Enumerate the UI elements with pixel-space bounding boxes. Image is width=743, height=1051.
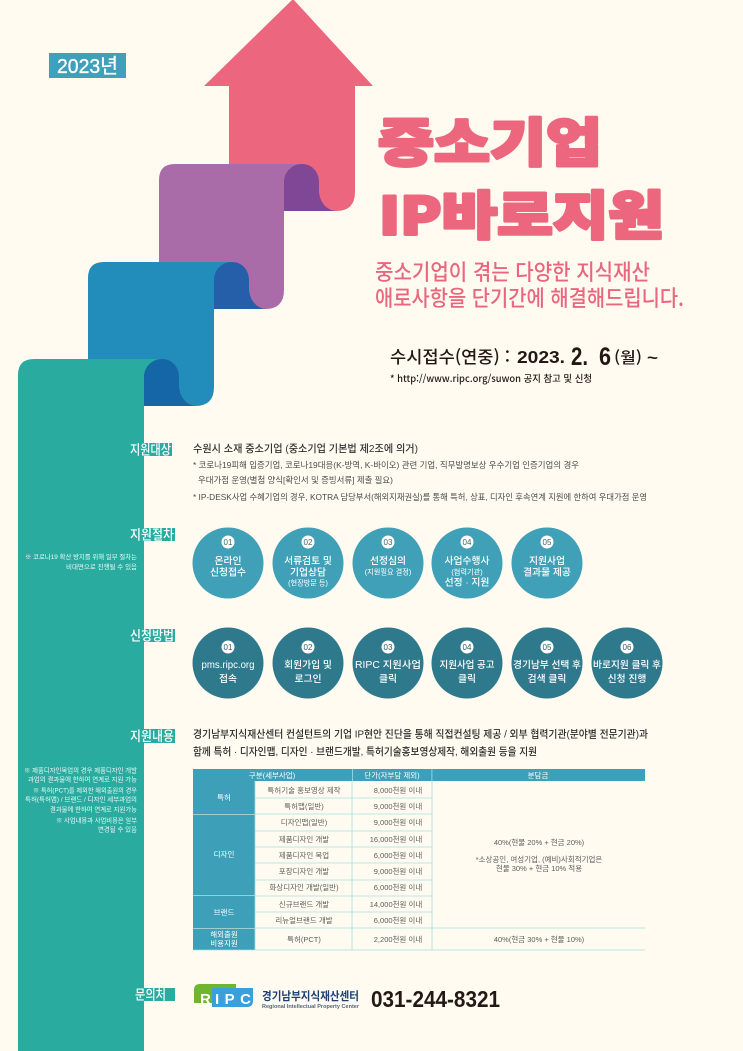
- eligibility text: 수원시 소재 중소기업 (중소기업 기본법 제2조에 의거): [193, 442, 418, 455]
- step 3: (지원필요 결정): [365, 568, 411, 576]
- table category cells: 디자인: [214, 849, 234, 859]
- method 4: 지원사업 공고: [440, 658, 494, 671]
- step 5: 결과물 제공: [523, 566, 571, 578]
- table detail and unit price rows: 포장디자인 개발: [279, 866, 329, 876]
- application date: 6: [599, 343, 611, 371]
- table detail and unit price rows: 특허(PCT): [287, 935, 321, 944]
- main title: [378, 102, 664, 250]
- table grid lines: [193, 781, 645, 950]
- procedure side note: [25, 552, 137, 571]
- method 5: 검색 클릭: [528, 672, 566, 685]
- table detail and unit price rows: 6,000천원 이내: [374, 882, 422, 892]
- step 4: 선정 · 지원: [445, 576, 489, 588]
- table detail and unit price rows: 특허맵(일반): [284, 801, 324, 811]
- table detail and unit price rows: 화상디자인 개발(일반): [269, 882, 339, 892]
- ribbon fold: dark blue: [214, 262, 267, 309]
- step 3: 03: [384, 538, 393, 547]
- step 3: 선정심의: [370, 555, 406, 567]
- table category cells: 특허: [217, 793, 231, 802]
- ribbon fold: dark purple: [284, 164, 337, 211]
- table detail and unit price rows: 제품디자인 목업: [279, 850, 329, 860]
- support content side note: 과업의 결과물에 한하여 연계로 지원 가능: [28, 774, 137, 784]
- method 5: [512, 628, 582, 698]
- step 2: 02: [304, 538, 313, 547]
- step 1: 신청접수: [210, 566, 246, 578]
- support content side note: 특허(특허맵) / 브랜드 / 디자인 세부과업의: [25, 794, 137, 804]
- table detail and unit price rows: 디자인맵(일반): [281, 817, 328, 827]
- table header: 단가(자부담 제외): [364, 770, 420, 780]
- table detail and unit price rows: 9,000천원 이내: [374, 817, 422, 827]
- table detail and unit price rows: 특허기술 홍보영상 제작: [267, 785, 341, 795]
- method 6: [592, 628, 662, 698]
- step 5: 지원사업: [529, 554, 565, 567]
- section label: contact: 문의처: [135, 988, 166, 1002]
- table detail and unit price rows: 9,000천원 이내: [374, 866, 422, 876]
- ribbon: teal side column: [18, 359, 162, 1051]
- table detail and unit price rows: 16,000천원 이내: [370, 834, 422, 844]
- support content description: [193, 728, 648, 758]
- procedure side note: 비대면으로 진행될 수 있음: [66, 562, 137, 571]
- section label: support content: 지원내용: [130, 729, 174, 744]
- organization name: [262, 989, 360, 1010]
- table contribution notes: [476, 838, 602, 944]
- method 4: [432, 628, 502, 698]
- application url note: * http://www.ripc.org/suwon 공지 참고 및 신청: [390, 371, 592, 385]
- phone number: 031-244-8321: [371, 986, 500, 1012]
- table category cells: 비용지원: [210, 939, 238, 948]
- main title: 중소기업: [378, 102, 602, 176]
- support content description: 함께 특허 · 디자인맵, 디자인 · 브랜드개발, 특허기술홍보영상제작, 해외출원 등을 지원: [193, 745, 537, 758]
- section label: eligibility: 지원대상: [130, 442, 171, 458]
- table detail and unit price rows: 신규브랜드 개발: [279, 899, 329, 909]
- table header: 분담금: [528, 770, 548, 780]
- method 2: [272, 628, 344, 698]
- organization name: 경기남부지식재산센터: [262, 989, 359, 1003]
- method 2: 로그인: [294, 673, 322, 685]
- table detail and unit price rows: [267, 785, 422, 944]
- RIPC logo: IPC: [215, 991, 251, 1008]
- table header: [193, 769, 645, 781]
- ribbon: purple: [159, 164, 302, 309]
- step 1: 온라인: [214, 555, 242, 567]
- table detail and unit price rows: 6,000천원 이내: [374, 850, 422, 860]
- table category cells: 해외출원: [210, 929, 238, 939]
- method 1: [192, 628, 264, 698]
- method 5: 경기남부 선택 후: [513, 659, 581, 671]
- section label: procedure: 지원절차: [130, 528, 175, 542]
- table detail and unit price rows: 14,000천원 이내: [370, 899, 422, 909]
- application steps: [192, 628, 662, 698]
- step 4: 사업수행사: [444, 554, 490, 567]
- application date: (월): [614, 346, 642, 368]
- table contribution notes: *소상공인, 여성기업, (예비)사회적기업은: [476, 854, 602, 864]
- organization name: Regional Intellectual Property Center: [262, 1004, 360, 1010]
- method 3: 클릭: [379, 673, 397, 685]
- step 4: [432, 528, 502, 598]
- ribbon fold: navy: [144, 359, 197, 406]
- table category cells: 브랜드: [214, 907, 234, 917]
- application date: 수시접수(연중) :: [390, 343, 510, 368]
- section label: how to apply: 신청방법: [130, 628, 174, 644]
- rising arrow made of folded ribbons: [18, 0, 373, 1051]
- method 2: 회원가입 및: [284, 658, 332, 671]
- step 2: 기업상담: [290, 566, 326, 578]
- method 3: 03: [384, 643, 393, 652]
- RIPC logo: R: [200, 991, 211, 1008]
- table contribution notes: 40%(현금 30% + 현물 10%): [494, 935, 585, 944]
- support content side note: 변경될 수 있음: [98, 824, 137, 834]
- procedure steps: [192, 528, 582, 598]
- table detail and unit price rows: 9,000천원 이내: [374, 801, 422, 811]
- method 1: pms.ripc.org: [202, 660, 254, 671]
- ribbon: pink arrow: [204, 0, 373, 211]
- table category cells: [193, 781, 255, 950]
- method 1: 접속: [219, 672, 237, 685]
- step 5: [512, 528, 582, 598]
- application date: 2023.: [517, 347, 565, 367]
- support content side note: 결과물에 한하여 연계로 지원가능: [50, 804, 137, 814]
- table detail and unit price rows: 8,000천원 이내: [374, 785, 422, 795]
- step 3: [352, 528, 424, 598]
- application date: [390, 343, 658, 371]
- step 2: 서류검토 및: [284, 554, 332, 567]
- table detail and unit price rows: 2,200천원 이내: [374, 934, 422, 944]
- table detail and unit price rows: 6,000천원 이내: [374, 915, 422, 925]
- step 4: 04: [463, 538, 472, 547]
- support content side note: ※ 제품디자인목업의 경우 제품디자인 개발: [24, 766, 137, 774]
- subtitle: 중소기업이 겪는 다양한 지식재산: [375, 255, 650, 287]
- method 1: 01: [224, 643, 233, 652]
- step 5: 05: [543, 538, 552, 547]
- method 5: 05: [543, 643, 552, 652]
- step 1: 01: [224, 538, 233, 547]
- subtitle: [375, 255, 684, 313]
- application date: ~: [647, 350, 658, 367]
- step 2: (현장방문 등): [288, 578, 328, 588]
- application date: 2.: [571, 343, 588, 371]
- support table: [193, 769, 645, 950]
- method 6: 06: [623, 643, 632, 652]
- step 2: [272, 528, 344, 598]
- year badge: 2023년: [57, 55, 118, 78]
- eligibility text: [193, 442, 647, 502]
- table contribution notes: 현물 30% + 현금 10% 적용: [496, 863, 582, 873]
- step 1: [192, 528, 264, 598]
- table detail and unit price rows: 리뉴얼브랜드 개발: [275, 915, 333, 925]
- eligibility text: * IP-DESK사업 수혜기업의 경우, KOTRA 담당부서(해외지재권실)를 통해 특허, 상표, 디자인 후속연계 지원에 한하여 우대가점 운영: [193, 492, 647, 502]
- procedure side note: ※ 코로나19 확산 방지를 위해 일부 절차는: [25, 552, 137, 561]
- support content side note: ※ 특허(PCT)를 제외한 해외출원의 경우: [33, 786, 137, 794]
- step 4: (협력기관): [451, 568, 483, 576]
- method 4: 클릭: [458, 673, 476, 685]
- method 3: [352, 628, 424, 698]
- table detail and unit price rows: 제품디자인 개발: [279, 834, 329, 844]
- subtitle: 애로사항을 단기간에 해결해드립니다.: [375, 281, 684, 313]
- method 4: 04: [463, 643, 472, 652]
- ribbon: blue: [88, 262, 232, 406]
- table header: 구분(세부사업): [249, 771, 296, 780]
- table contribution notes: 40%(현물 20% + 현금 20%): [494, 838, 585, 847]
- method 3: RIPC 지원사업: [355, 658, 421, 671]
- support content side note: [24, 766, 137, 834]
- method 6: 신청 진행: [608, 673, 646, 685]
- eligibility text: * 코로나19피해 입증기업, 코로나19대응(K-방역, K-바이오) 관련 기업, 직무발명보상 우수기업 인증기업의 경우: [193, 460, 579, 470]
- eligibility text: 우대가점 운영(별첨 양식[확인서 및 증빙서류] 제출 필요): [198, 475, 393, 485]
- support content description: 경기남부지식재산센터 컨설턴트의 기업 IP현안 진단을 통해 직접컨설팅 제공 / 외부 협력기관(분야별 전문기관)과: [193, 728, 648, 740]
- main title: IP바로지원: [379, 174, 664, 250]
- support content side note: ※ 사업내용과 사업비용은 일부: [56, 816, 137, 824]
- RIPC logo: [194, 984, 253, 1008]
- method 2: 02: [304, 643, 313, 652]
- method 6: 바로지원 클릭 후: [593, 658, 661, 671]
